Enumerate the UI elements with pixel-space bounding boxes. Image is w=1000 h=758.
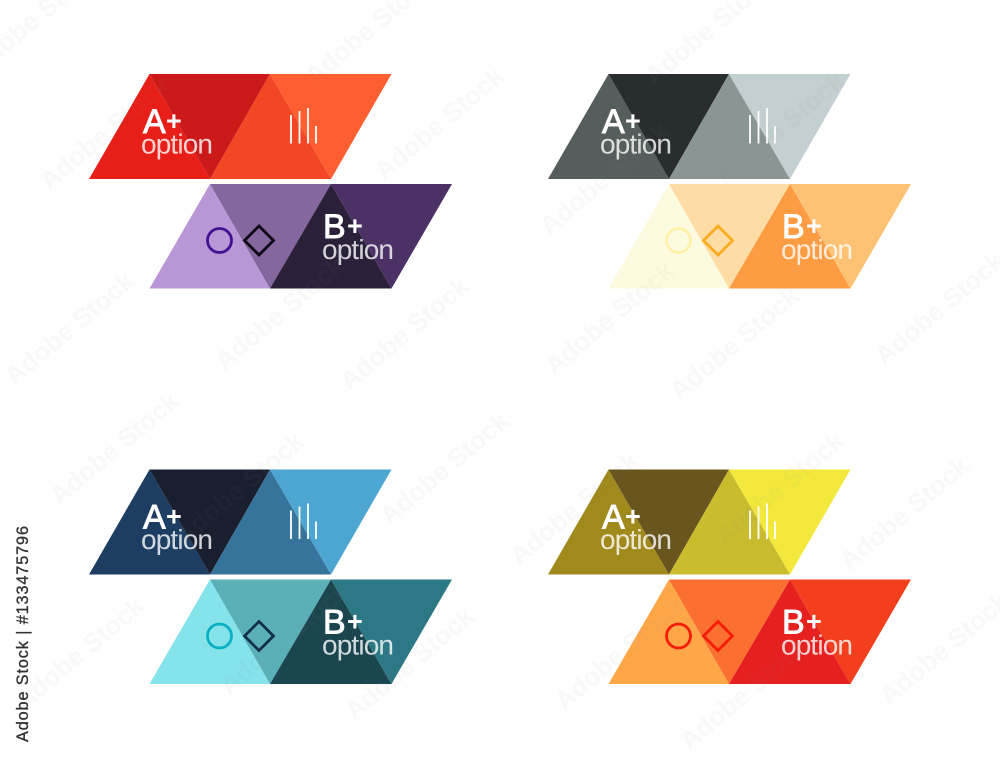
label: B+ option: B [782, 604, 805, 642]
label: B+ option: option [781, 630, 853, 660]
label: A+ option [600, 498, 672, 555]
label: B+ option: option [322, 234, 394, 265]
label: A+ option [141, 498, 213, 555]
icon: bars [291, 504, 316, 539]
watermark pattern: Adobe Stock [374, 405, 515, 531]
panel: navy and teal banners [89, 470, 452, 684]
icon: bars [750, 504, 775, 539]
label: B+ option: + [347, 606, 363, 636]
watermark pattern: Adobe Stock [34, 70, 175, 196]
icon: circle [666, 228, 690, 252]
panel: grey and orange banners [548, 74, 911, 288]
credit: vertical stock ID text: Adobe Stock | #133475796 [14, 526, 32, 742]
watermark pattern: Adobe Stock [539, 255, 680, 381]
icon: diamond [244, 226, 274, 255]
label: A+ option: A [143, 498, 166, 536]
watermark pattern: Adobe Stock [9, 590, 150, 716]
label: B+ option: B [323, 604, 346, 642]
banner A: red [89, 74, 392, 179]
icon: circle [666, 624, 690, 648]
label: B+ option: B [323, 208, 346, 246]
watermark pattern: Adobe Stock [664, 280, 805, 406]
label: A+ option: + [166, 106, 182, 136]
label: A+ option [600, 103, 672, 160]
watermark pattern: Adobe Stock [44, 385, 185, 511]
icon: circle [208, 228, 232, 252]
label: A+ option: A [602, 498, 625, 536]
label: B+ option [322, 208, 394, 265]
watermark pattern: Adobe Stock [334, 270, 475, 396]
watermark pattern: Adobe Stock [834, 450, 975, 576]
label: A+ option: + [166, 502, 182, 532]
label: B+ option [781, 208, 853, 265]
label: B+ option: + [806, 606, 822, 636]
banner B: teal [150, 580, 452, 684]
label: A+ option: option [141, 128, 213, 160]
label: A+ option: option [600, 128, 672, 160]
panel: olive and red-orange banners [548, 470, 911, 684]
watermark pattern: Adobe Stock [0, 265, 140, 391]
icon: diamond [244, 622, 274, 650]
label: B+ option: option [781, 234, 853, 265]
icon: diamond [704, 622, 732, 650]
watermark pattern: Adobe Stock [534, 115, 675, 241]
watermark pattern: Adobe Stock [674, 630, 815, 756]
label: B+ option: B [782, 208, 805, 246]
watermark pattern: Adobe Stock [169, 425, 310, 551]
panel: red and purple banners [89, 74, 452, 288]
watermark pattern: Adobe Stock [504, 445, 645, 571]
label: A+ option [141, 103, 213, 160]
banner A: grey [548, 74, 850, 179]
label: B+ option: + [806, 211, 822, 241]
label: B+ option: option [322, 630, 394, 660]
icon: circle [208, 624, 232, 648]
icon: bars [750, 108, 775, 144]
label: B+ option [781, 604, 853, 660]
label: B+ option [322, 604, 394, 660]
watermark pattern: Adobe Stock [549, 590, 690, 716]
label: A+ option: A [143, 103, 166, 141]
watermark pattern: Adobe Stock [709, 65, 850, 191]
icon: diamond [704, 226, 732, 255]
watermark pattern: Adobe Stock [369, 60, 510, 186]
label: A+ option: A [602, 103, 625, 141]
watermark pattern: Adobe Stock [209, 250, 350, 376]
label: A+ option: option [600, 524, 672, 555]
label: B+ option: + [347, 211, 363, 241]
icon: bars [291, 108, 316, 144]
label: A+ option: option [141, 524, 213, 555]
banner A: navy [89, 470, 392, 574]
watermark pattern: Adobe Stock [214, 575, 355, 701]
banner A: olive [548, 470, 850, 574]
watermark pattern: Adobe Stock [709, 425, 850, 551]
label: A+ option: + [625, 502, 641, 532]
banner B: orange [608, 184, 911, 288]
banner B: red-orange [608, 580, 911, 684]
banner B: purple [150, 184, 452, 288]
label: A+ option: + [625, 106, 641, 136]
watermark pattern: Adobe Stock [339, 600, 480, 726]
